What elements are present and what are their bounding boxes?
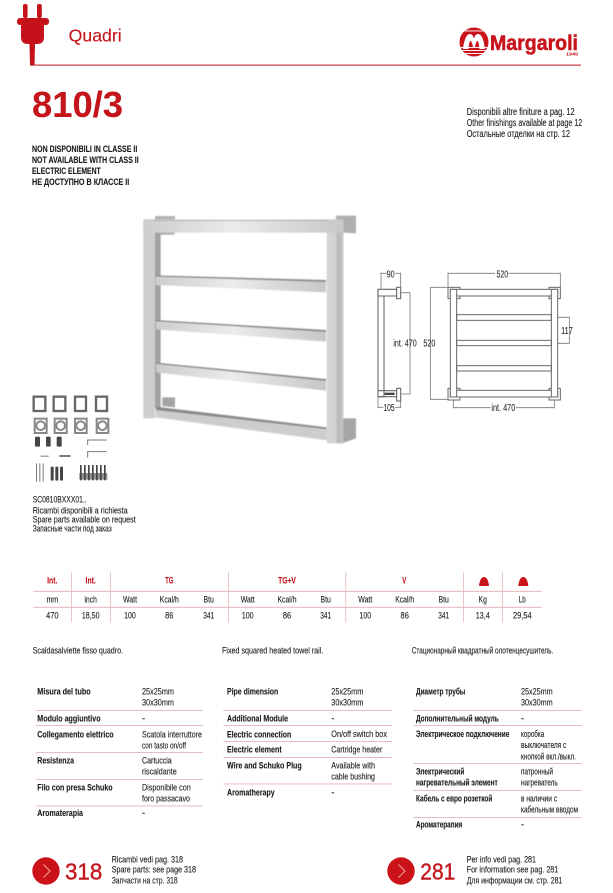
spec table: English: Electric element: [227, 744, 282, 755]
spec table: Russian: 25x25mm: [521, 685, 553, 696]
spec table: English: Pipe dimension: [227, 685, 278, 696]
product photo: towel rail: [143, 216, 356, 443]
table header: [47, 574, 407, 585]
units row: inch: [85, 594, 97, 605]
values row: 341: [438, 610, 449, 621]
units row: Btu: [204, 594, 214, 605]
spare parts text: SC0810BXXX01..: [33, 494, 87, 504]
spec table: Italian: Filo con presa Schuko: [37, 782, 113, 793]
spec table: Russian: Диаметр трубы: [416, 685, 465, 696]
spec table: Russian: Ароматерапия: [416, 819, 462, 830]
spare parts text: [33, 494, 136, 534]
spec table: Italian: Cartuccia: [142, 754, 172, 765]
dimension lines: [378, 273, 569, 408]
dimension labels: 117: [561, 326, 573, 337]
spare parts illustration: [34, 397, 108, 482]
icon: weight: [518, 577, 528, 586]
data table: [33, 572, 542, 623]
logo: Margaroli: Margaroli: [490, 32, 578, 55]
spec table: Russian: Электрический: [416, 765, 464, 776]
spec table: Italian: foro passacavo: [142, 793, 190, 804]
class II notice: ELECTRIC ELEMENT: [32, 166, 101, 176]
spec table: English: 30x30mm: [331, 697, 363, 708]
spec table: Russian: -: [521, 819, 524, 830]
model number: 810/3: [32, 84, 123, 125]
values row: 86: [165, 610, 173, 621]
dimension labels: [383, 269, 573, 414]
description: Italian: Scaldasalviette fisso quadro.: [33, 644, 123, 655]
spec table: English: On/off switch box: [331, 728, 387, 739]
spec table: Russian: патронный: [521, 765, 553, 776]
spec table: English: Additional Module: [227, 712, 288, 723]
spec table: English: Aromatherapy: [227, 786, 275, 797]
spec table: English: Electric connection: [227, 728, 292, 739]
header rule: [30, 65, 581, 66]
table header: Int.: [47, 574, 57, 585]
table header: Int.: [86, 574, 96, 585]
logo: Margaroli: [459, 28, 578, 58]
spec table: Italian: Disponibile con: [142, 782, 191, 793]
spare parts text: Ricambi disponibili a richiesta: [33, 506, 128, 516]
values row: 341: [203, 610, 214, 621]
icon: arrow circle: [387, 857, 415, 885]
units row: Kg: [479, 594, 487, 605]
footer link: information page 281: For information see pag. 281: [467, 864, 558, 875]
description: English: Fixed squared heated towel rail.: [222, 644, 323, 655]
spec table: English: 25x25mm: [331, 685, 363, 696]
units row: Kcal/h: [395, 594, 414, 605]
values row: 341: [320, 610, 331, 621]
spec table: Italian: 30x30mm: [142, 697, 174, 708]
spec table: Italian: Misura del tubo: [37, 685, 91, 696]
spec table: Italian: Aromaterapia: [37, 807, 84, 818]
footer link: information page 281: 281: [420, 858, 455, 884]
values row: [46, 610, 532, 621]
side view: [378, 287, 401, 401]
spec table: English: -: [331, 786, 334, 797]
spec table: Italian: -: [142, 807, 145, 818]
icon: weight: [479, 577, 489, 586]
dimension labels: int. 470: [491, 403, 516, 414]
spec table: Italian: [36, 685, 203, 818]
values row: 29,54: [513, 610, 532, 621]
class II notice: [32, 144, 139, 187]
spec table: Italian: 25x25mm: [142, 685, 174, 696]
footer link: information page 281: Для информации см. стр. 281: [467, 875, 562, 886]
values row: 18,50: [82, 610, 100, 621]
class II notice: NOT AVAILABLE WITH CLASS II: [32, 155, 139, 165]
units row: Watt: [241, 594, 255, 605]
table header: TG: [165, 574, 173, 585]
spec table: Russian: нагреватель: [521, 777, 558, 788]
technical drawing: side and front views: [378, 269, 573, 414]
spec table: Russian: -: [521, 712, 524, 723]
footer link: spare parts page 318: Spare parts: see page 318: [112, 864, 196, 875]
icon: arrow circle: [32, 857, 60, 885]
spec table: Italian: Resistenza: [37, 754, 75, 765]
logo: Margaroli: 1949: [566, 52, 578, 58]
units row: Watt: [358, 594, 373, 605]
spec table: English: Wire and Schuko Plug: [227, 760, 302, 771]
spec table: English: -: [331, 712, 334, 723]
dimension labels: 520: [496, 269, 508, 280]
spec table: Russian: Электрическое подключение: [416, 728, 509, 739]
table rules: [33, 572, 542, 623]
icon: plug: [17, 4, 49, 65]
values row: 86: [401, 610, 409, 621]
values row: 100: [242, 610, 254, 621]
description: Russian: Стационарный квадратный олотенцесушитель.: [412, 644, 553, 655]
spec table: Russian: в наличии с: [521, 793, 557, 804]
dimension labels: 90: [387, 269, 395, 280]
spec table: Russian: нагревательный элемент: [416, 777, 498, 788]
spec table: Italian: Scatola interruttore: [142, 728, 202, 739]
units row: Btu: [439, 594, 449, 605]
footer link: spare parts page 318: [32, 853, 196, 886]
class II notice: НЕ ДОСТУПНО В КЛАССЕ II: [32, 177, 129, 187]
spec table: Russian: Кабель с евро розеткой: [416, 793, 492, 804]
dimension labels: int. 470: [393, 339, 417, 350]
units row: mm: [46, 594, 58, 605]
units row: Watt: [123, 594, 137, 605]
footer link: spare parts page 318: 318: [65, 858, 102, 884]
spec table: Russian: 30x30mm: [521, 697, 553, 708]
spec table: Russian: кнопкой вкл./выкл.: [521, 750, 576, 761]
spec table: English: Cartridge heater: [331, 744, 382, 755]
dimension labels: 520: [423, 339, 436, 350]
spare parts text: Spare parts available on request: [33, 515, 136, 525]
spec table: Italian: riscaldante: [142, 765, 177, 776]
spec table: Russian: Дополнительный модуль: [416, 712, 499, 723]
spec table: Italian: Collegamento elettrico: [37, 728, 114, 739]
values row: 100: [359, 610, 371, 621]
spec table: Italian: Modulo aggiuntivo: [37, 712, 101, 723]
spec table: English: cable bushing: [331, 771, 375, 782]
footer link: information page 281: [387, 853, 562, 886]
units row: Kcal/h: [160, 594, 179, 605]
values row: 470: [46, 610, 59, 621]
spec table: Russian: кабельным вводом: [521, 804, 578, 815]
footer link: information page 281: Per info vedi pag. 281: [467, 853, 536, 864]
units row: [46, 594, 526, 605]
units row: Lb: [519, 594, 526, 605]
footer link: spare parts page 318: Ricambi vedi pag. 318: [112, 853, 183, 864]
finishes note: Disponibili altre finiture a pag. 12: [467, 107, 575, 118]
dimension labels: 105: [383, 403, 395, 414]
table header: V: [402, 574, 407, 585]
spec table: Italian: -: [142, 712, 145, 723]
table header: TG+V: [278, 574, 296, 585]
values row: 86: [283, 610, 291, 621]
footer link: spare parts page 318: Запчасти на стр. 318: [112, 875, 178, 886]
spec table: Russian: [413, 685, 582, 830]
units row: Btu: [321, 594, 331, 605]
values row: 13,4: [476, 610, 490, 621]
spec table: English: Available with: [331, 760, 375, 771]
spec table: Italian: con tasto on/off: [142, 739, 186, 750]
spec table: Russian: выключателя с: [521, 739, 567, 750]
spec table: English: [223, 685, 392, 797]
values row: 100: [124, 610, 136, 621]
spec table: Russian: коробка: [521, 728, 545, 739]
spare parts text: Запасные части под заказ: [33, 524, 112, 534]
finishes note: Остальные отделки на стр. 12: [467, 129, 570, 140]
front view: [448, 287, 560, 400]
class II notice: NON DISPONIBILI IN CLASSE II: [32, 144, 137, 154]
finishes note: [467, 107, 582, 140]
units row: Kcal/h: [278, 594, 296, 605]
section title: Quadri: [69, 26, 122, 46]
